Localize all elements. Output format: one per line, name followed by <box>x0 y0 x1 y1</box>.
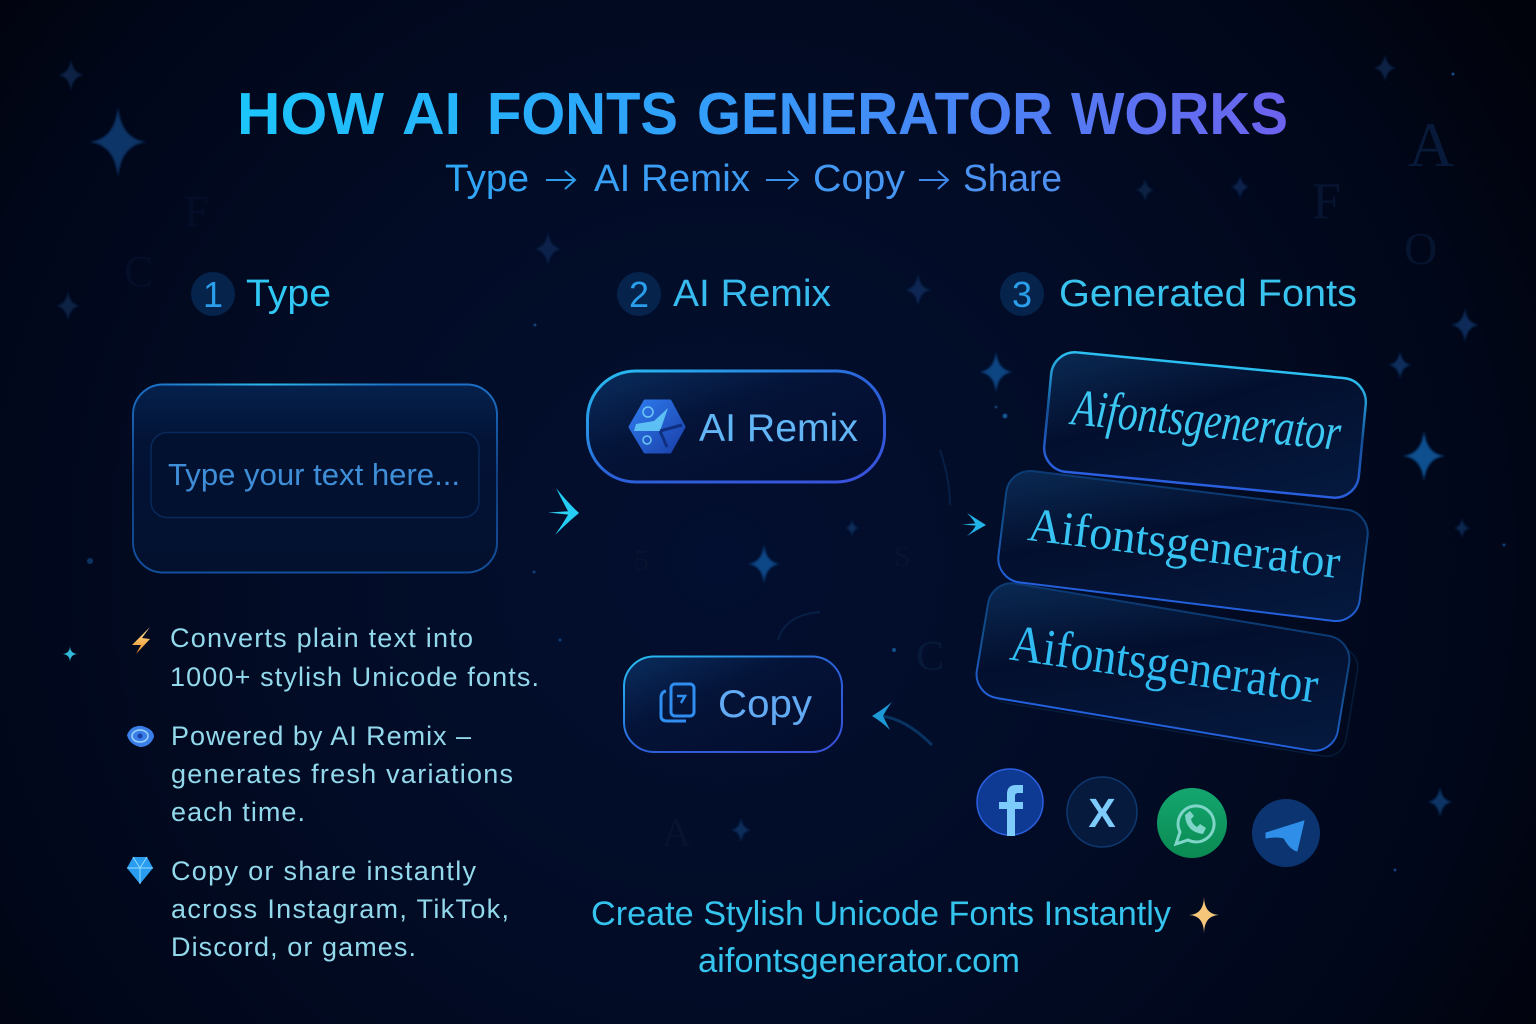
card 2: serif font <box>996 468 1370 624</box>
title: GENERATOR <box>697 81 1053 147</box>
bullet 2 text: Powered by AI Remix – <box>171 721 471 751</box>
connector: generated fonts arrow <box>940 450 986 536</box>
arrow: input to remix <box>548 488 579 535</box>
social: Telegram <box>1252 799 1320 867</box>
icon: copy <box>661 684 694 721</box>
bullet 3: diamond icon <box>127 857 153 884</box>
bullet 3 text: across Instagram, TikTok, <box>171 894 509 924</box>
bullet 2 text <box>171 721 513 827</box>
Copy button <box>624 656 842 752</box>
card 2: serif font: Aifontsgenerator <box>1025 498 1343 589</box>
subtitle: Type, AI Remix, Copy, Share flow: Share <box>963 158 1062 200</box>
step 2 heading <box>617 272 831 316</box>
call to action: Create Stylish Unicode Fonts Instantly <box>591 895 1171 933</box>
faint background letters: F <box>184 187 208 236</box>
faint background letters: A <box>1408 109 1454 180</box>
icon: dice <box>630 401 684 452</box>
social: X: X <box>1088 790 1116 836</box>
small sparkle and dots <box>62 72 1506 872</box>
website: aifontsgenerator.com <box>698 942 1020 980</box>
bullet 1: lightning icon <box>132 627 150 654</box>
step 3 heading: 3 <box>1012 274 1032 315</box>
faint background letters: A <box>662 810 691 855</box>
bullet 1 text: Converts plain text into <box>170 623 473 653</box>
social: Facebook <box>977 769 1043 836</box>
faint background letters: F <box>1312 173 1341 230</box>
step 1 heading: 1 <box>203 274 223 315</box>
bullet 3 text <box>171 856 509 962</box>
faint background letters <box>124 109 1454 855</box>
social: WhatsApp <box>1157 788 1227 858</box>
card 1: italic font <box>1042 350 1368 500</box>
AI Remix button <box>588 371 884 482</box>
subtitle: Type, AI Remix, Copy, Share flow <box>445 158 1062 200</box>
bullet 3 text: Discord, or games. <box>171 932 416 962</box>
faint background letters: S <box>894 540 911 573</box>
input field <box>151 432 479 518</box>
title <box>237 81 1288 147</box>
card 3: blackletter font <box>973 580 1353 754</box>
bullet 2 text: generates fresh variations <box>171 759 513 789</box>
bullet 2 text: each time. <box>171 797 305 827</box>
bullet 2: swirl icon <box>127 726 154 747</box>
title: AI <box>402 81 461 147</box>
title: FONTS <box>487 81 678 147</box>
icon: gold sparkle <box>1189 897 1219 933</box>
bullet 3 text: Copy or share instantly <box>171 856 476 886</box>
title: HOW <box>237 81 384 147</box>
card 3: blackletter font: Aifontsgenerator <box>1007 615 1322 714</box>
step 2 heading: AI Remix <box>673 273 831 315</box>
step 1 heading: Type <box>246 273 331 315</box>
faint background letters: C <box>916 634 944 680</box>
background sparkles <box>55 53 1479 843</box>
step 2 heading: 2 <box>629 274 649 315</box>
placeholder text: Type your text here... <box>168 457 460 492</box>
title: WORKS <box>1071 81 1288 147</box>
social: X <box>1067 777 1137 847</box>
stack shadow panel <box>988 591 1361 759</box>
subtitle: Type, AI Remix, Copy, Share flow: Type <box>445 158 529 200</box>
connector: cards to copy arrow <box>778 612 932 745</box>
panel: text input <box>133 384 497 572</box>
card 1: italic font: Aifontsgenerator <box>1067 379 1344 462</box>
bullet 1 text <box>170 623 539 692</box>
faint background letters: C <box>124 247 153 296</box>
faint background letters: 5 <box>634 544 649 577</box>
step 1 heading <box>191 272 331 316</box>
bullet 1 text: 1000+ stylish Unicode fonts. <box>170 662 539 692</box>
Copy button: Copy <box>718 683 813 726</box>
subtitle: Type, AI Remix, Copy, Share flow: Copy <box>813 158 905 200</box>
subtitle: Type, AI Remix, Copy, Share flow: AI Remix <box>594 158 750 200</box>
AI Remix button: AI Remix <box>699 407 858 450</box>
faint background letters: O <box>1404 223 1437 274</box>
step 3 heading: Generated Fonts <box>1059 273 1357 315</box>
